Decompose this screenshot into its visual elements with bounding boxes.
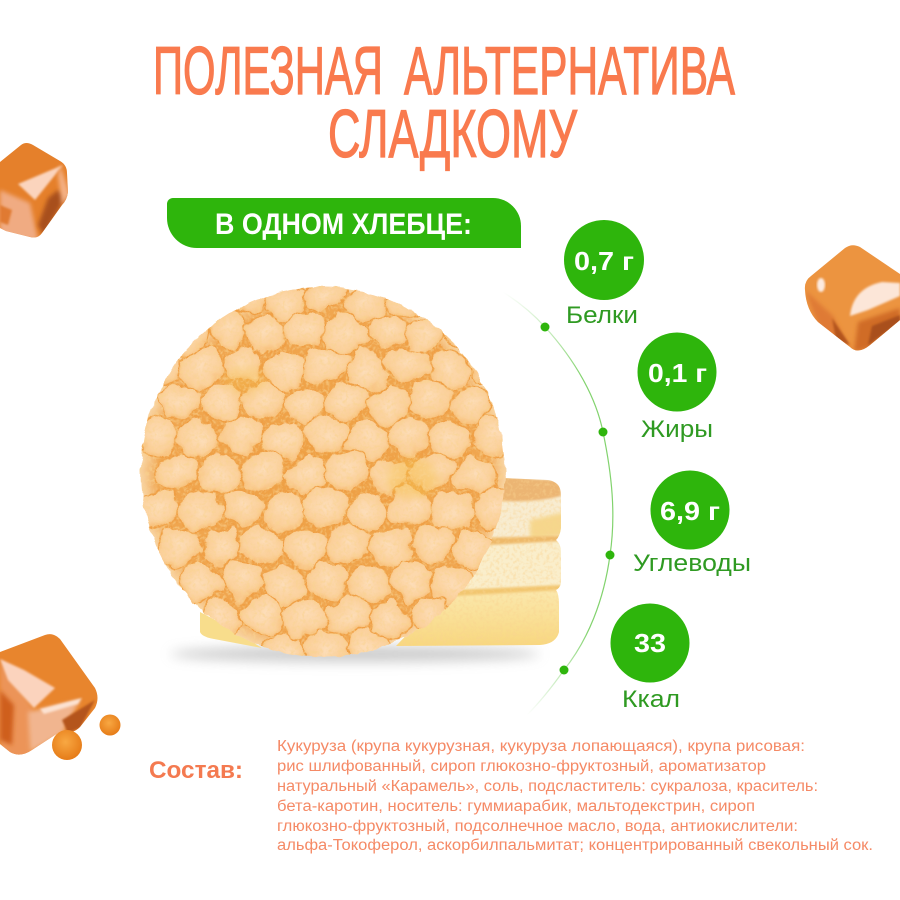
heading pill: in one cake [167,198,521,248]
stat: fats: Жиры [641,416,713,443]
composition label: Состав: [149,757,243,784]
stat: proteins: Белки [566,302,638,329]
stat: calories: 33 [634,628,666,658]
icon: caramel top left [0,140,70,240]
title: ПОЛЕЗНАЯ [153,33,383,109]
composition text: глюкозно-фруктозный, подсолнечное масло, вода, антиокислители: [277,818,798,835]
icon: caramel drop large [52,730,82,760]
marker: fats [598,428,608,436]
stat: fats: 0,1 г [648,358,707,388]
marker: carbs [606,550,614,560]
stat: carbohydrates: Углеводы [633,550,751,577]
cracker illustration [130,280,565,669]
heading pill: in one cake: В ОДНОМ ХЛЕБЦЕ: [215,208,472,241]
stat: carbohydrates: 6,9 г [660,496,720,526]
composition text [277,738,873,854]
icon: caramel right [804,245,900,350]
composition text: рис шлифованный, сироп глюкозно-фруктозный, ароматизатор [277,758,766,775]
title [153,33,735,172]
composition text: альфа-Токоферол, аскорбилпальмитат; концентрированный свекольный сок. [277,837,873,854]
marker: kcal [560,666,568,674]
icon: caramel bottom left with drops [0,630,120,760]
main cracker disc [130,280,516,669]
stat: fats [638,332,716,443]
stat: calories: Ккал [622,686,680,713]
decorative arc with markers [503,292,614,715]
title: СЛАДКОМУ [328,96,578,172]
composition text: натуральный «Карамель», соль, подсластитель: сукралоза, краситель: [277,778,818,795]
marker: proteins [540,322,550,332]
composition text: Кукуруза (крупа кукурузная, кукуруза лопающаяся), крупа рисовая: [277,738,805,755]
stacked crackers behind [200,470,565,650]
composition text: бета-каротин, носитель: гуммиарабик, мальтодекстрин, сироп [277,798,755,815]
stat: carbohydrates [633,470,751,577]
stat: proteins: 0,7 г [574,246,634,276]
stat: calories [610,604,690,713]
icon: caramel drop small [100,714,120,736]
stat: proteins [564,220,644,329]
shadow under crackers [170,646,540,662]
